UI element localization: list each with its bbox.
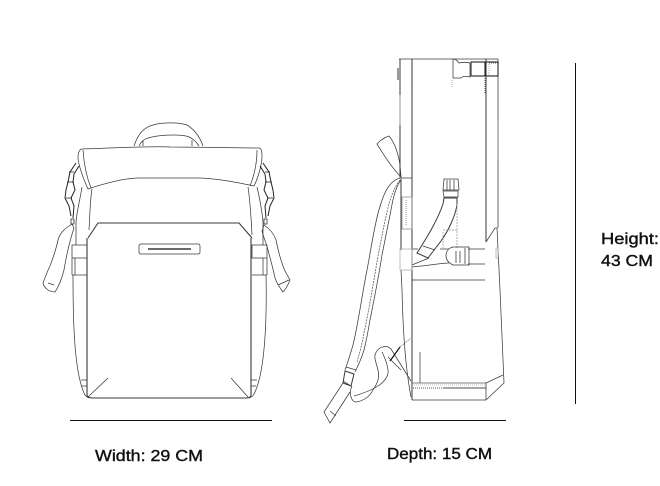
roll-top flap [78, 147, 262, 189]
brand label patch [402, 197, 412, 229]
shoulder strap [324, 178, 411, 423]
width dimension line [70, 420, 272, 422]
top of strap tab [377, 136, 401, 177]
backpack side view [324, 59, 504, 423]
width label: Width: 29 CM [95, 448, 203, 465]
right buckle and strap [260, 163, 290, 292]
top handle [134, 123, 203, 146]
side buckle and folded strap [417, 179, 459, 258]
height dimension line [574, 63, 576, 404]
left buckle and strap [43, 163, 79, 292]
side webbing blocks [72, 245, 267, 258]
depth dimension line [404, 420, 506, 422]
corner seams [88, 378, 248, 397]
front panel [87, 223, 252, 398]
waist webbing [412, 249, 485, 280]
height label: 43 CM [601, 253, 653, 270]
depth label: Depth: 15 CM [387, 446, 492, 463]
webbing buckle [446, 247, 469, 265]
height label [601, 231, 659, 270]
handle slot [139, 244, 200, 254]
height label: Height: [601, 231, 659, 248]
top buckle [452, 59, 498, 93]
body upper sides [76, 187, 263, 245]
bottom base [412, 352, 503, 400]
main outline [399, 59, 498, 228]
body outer sides [73, 275, 266, 398]
backpack front view [43, 123, 290, 398]
